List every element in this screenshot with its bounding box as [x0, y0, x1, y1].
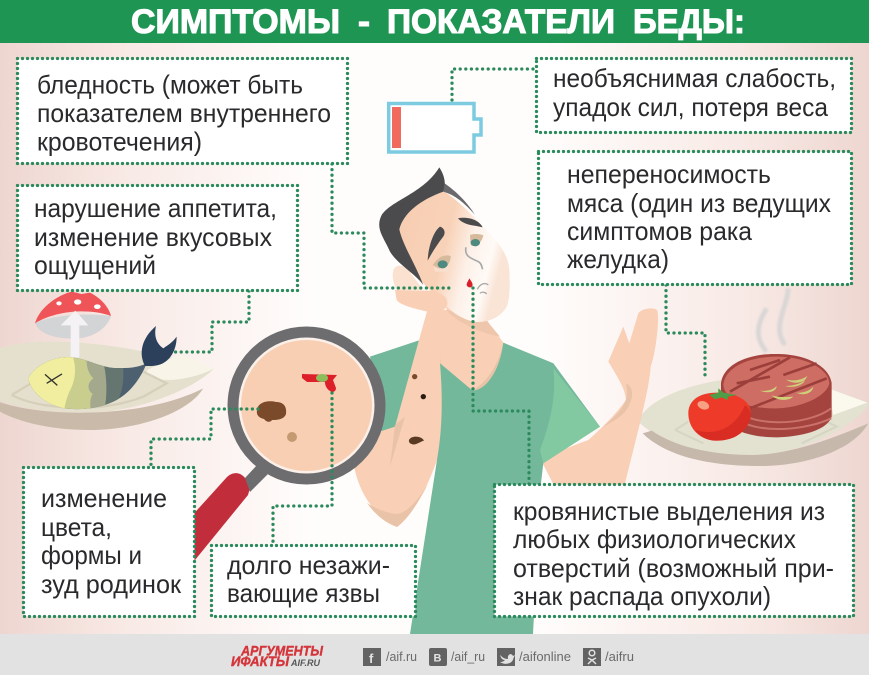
- social: facebook: [363, 648, 417, 666]
- moles on arm: [409, 374, 426, 444]
- callout: meat intolerance: желудка): [567, 244, 669, 274]
- callout: sores: [212, 546, 416, 616]
- hand under the chin: [395, 290, 447, 312]
- social: vk: В: [434, 652, 442, 664]
- connector: battery: [452, 69, 536, 100]
- callout: bleeding: отверстий (возможный при-: [513, 553, 834, 583]
- birthmark: [257, 401, 286, 422]
- icon: steam: [758, 288, 788, 352]
- callout: appetite: [18, 186, 298, 290]
- callout: moles: цвета,: [41, 512, 112, 542]
- social: facebook: f: [369, 651, 374, 666]
- left arm: [353, 310, 447, 527]
- connector: moles: [151, 409, 258, 467]
- eyebrows: [428, 218, 483, 261]
- callout: appetite: ощущений: [34, 250, 156, 280]
- logo: ИФАКТЫ: [231, 653, 290, 669]
- ulcer: [302, 374, 337, 392]
- callout: bleeding: знак распада опухоли): [513, 581, 771, 611]
- callout: weakness: упадок сил, потеря веса: [553, 92, 828, 122]
- social: twitter: /aifonline: [519, 650, 571, 664]
- magnifying glass: [160, 332, 380, 590]
- logo: АРГУМЕНТЫ: [240, 642, 324, 658]
- connector: bleeding: [473, 288, 529, 484]
- callout: moles: изменение: [41, 483, 167, 513]
- logo: AIF.RU: [290, 658, 320, 668]
- callout: appetite: нарушение аппетита,: [34, 193, 277, 223]
- man figure: [353, 167, 658, 634]
- social: vk: [429, 648, 485, 666]
- icon: steak: [721, 354, 832, 437]
- title bar: ПОКАЗАТЕЛИ: [387, 3, 615, 41]
- callout: pallor: показателем внутреннего: [37, 98, 331, 128]
- plate with steak and tomato: [638, 288, 869, 466]
- callout: meat intolerance: мяса (один из ведущих: [567, 188, 831, 218]
- social: facebook: /aif.ru: [386, 650, 417, 664]
- head: [399, 191, 510, 322]
- title bar: [0, 0, 869, 43]
- callout: meat intolerance: [538, 152, 852, 284]
- title bar: СИМПТОМЫ: [131, 3, 340, 41]
- title bar: -: [358, 3, 370, 41]
- connector: appetite: [173, 291, 249, 352]
- ear: [393, 266, 423, 290]
- callout: pallor: бледность (может быть: [37, 70, 303, 100]
- callout: sores: долго незажи-: [227, 550, 390, 580]
- callout: moles: [24, 468, 194, 616]
- icon: low battery: [389, 104, 481, 152]
- logo: [231, 642, 324, 669]
- callout: meat intolerance: непереносимость: [567, 159, 771, 189]
- callout: moles: формы и: [41, 540, 142, 570]
- callout: weakness: [536, 58, 852, 132]
- title bar: БЕДЫ:: [633, 3, 745, 41]
- callout: pallor: кровотечения): [37, 126, 202, 156]
- eyes: [433, 234, 483, 272]
- callout: bleeding: [494, 484, 854, 616]
- footer bar: [0, 634, 869, 675]
- callout: appetite: изменение вкусовых: [34, 222, 272, 252]
- social: odnoklassniki: [583, 648, 634, 666]
- callout: sores: вающие язвы: [227, 578, 380, 608]
- connector: sores: [273, 393, 332, 545]
- right arm and hand: [540, 308, 658, 517]
- connector: pallor: [332, 164, 453, 288]
- social: vk: /aif_ru: [451, 650, 485, 664]
- sleeve: [540, 368, 600, 463]
- icon: tomato: [688, 388, 751, 441]
- blood drop: [467, 278, 473, 287]
- callout: moles: зуд родинок: [41, 569, 182, 599]
- connector: meat: [666, 285, 705, 380]
- nose lines: [466, 247, 483, 269]
- callout: bleeding: любых физиологических: [513, 524, 796, 554]
- callout: pallor: [18, 58, 348, 164]
- shirt: [370, 340, 600, 634]
- callout: meat intolerance: симптомов рака: [567, 216, 753, 246]
- neck: [440, 307, 503, 391]
- callout: weakness: необъяснимая слабость,: [553, 63, 836, 93]
- icon: mushroom: [35, 292, 111, 357]
- social: odnoklassniki: /aifru: [605, 650, 634, 664]
- icon: fish: [20, 326, 177, 413]
- callout: bleeding: кровянистые выделения из: [513, 496, 825, 526]
- hair: [379, 167, 445, 285]
- plate with poisoned fish and mushroom: [0, 292, 214, 430]
- mouth: [477, 284, 488, 294]
- social: twitter: [497, 648, 571, 666]
